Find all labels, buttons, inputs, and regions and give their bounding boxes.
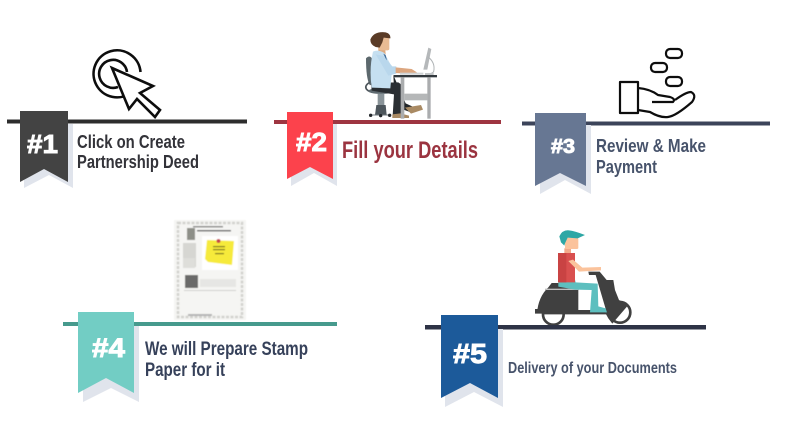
ribbon: #5 xyxy=(441,315,503,407)
panel: step 4 xyxy=(63,220,337,402)
divider line xyxy=(425,325,706,330)
illustration: person at desk xyxy=(366,32,437,119)
text: step 4 xyxy=(145,339,308,381)
ribbon: #1: #1 xyxy=(27,129,58,159)
text: step 4: Paper for it xyxy=(145,360,226,381)
text: step 1: Partnership Deed xyxy=(77,152,199,172)
text: step 1: Click on Create xyxy=(77,132,185,152)
panel: step 5 xyxy=(425,230,706,407)
text: step 2: Fill your Details xyxy=(342,137,478,164)
divider line xyxy=(522,122,770,126)
ribbon: #3 xyxy=(535,113,591,194)
text: step 3: Payment xyxy=(596,157,657,177)
ribbon: #2: #2 xyxy=(296,127,327,157)
text: step 5: Delivery of your Documents xyxy=(508,360,677,377)
panel: step 2 xyxy=(274,32,501,186)
divider line xyxy=(7,120,247,124)
ribbon: #4: #4 xyxy=(92,333,125,363)
text: step 4: We will Prepare Stamp xyxy=(145,339,308,360)
icon: cursor click xyxy=(94,50,160,117)
icon: hand with coins xyxy=(620,49,694,117)
panel: step 1 xyxy=(7,50,247,188)
text: step 1 xyxy=(77,132,199,172)
ribbon: #2 xyxy=(287,112,337,186)
text: step 3 xyxy=(596,136,706,177)
ribbon: #1 xyxy=(20,111,73,188)
text: step 3: Review & Make xyxy=(596,136,706,156)
illustration: scooter rider xyxy=(535,230,630,325)
ribbon: #5: #5 xyxy=(453,338,487,369)
ribbon: #4 xyxy=(78,312,139,402)
panel: step 3 xyxy=(522,49,770,194)
ribbon: #3: #3 xyxy=(551,136,575,158)
divider line xyxy=(63,322,337,326)
illustration: stamp paper xyxy=(174,220,246,320)
divider line xyxy=(274,120,501,124)
